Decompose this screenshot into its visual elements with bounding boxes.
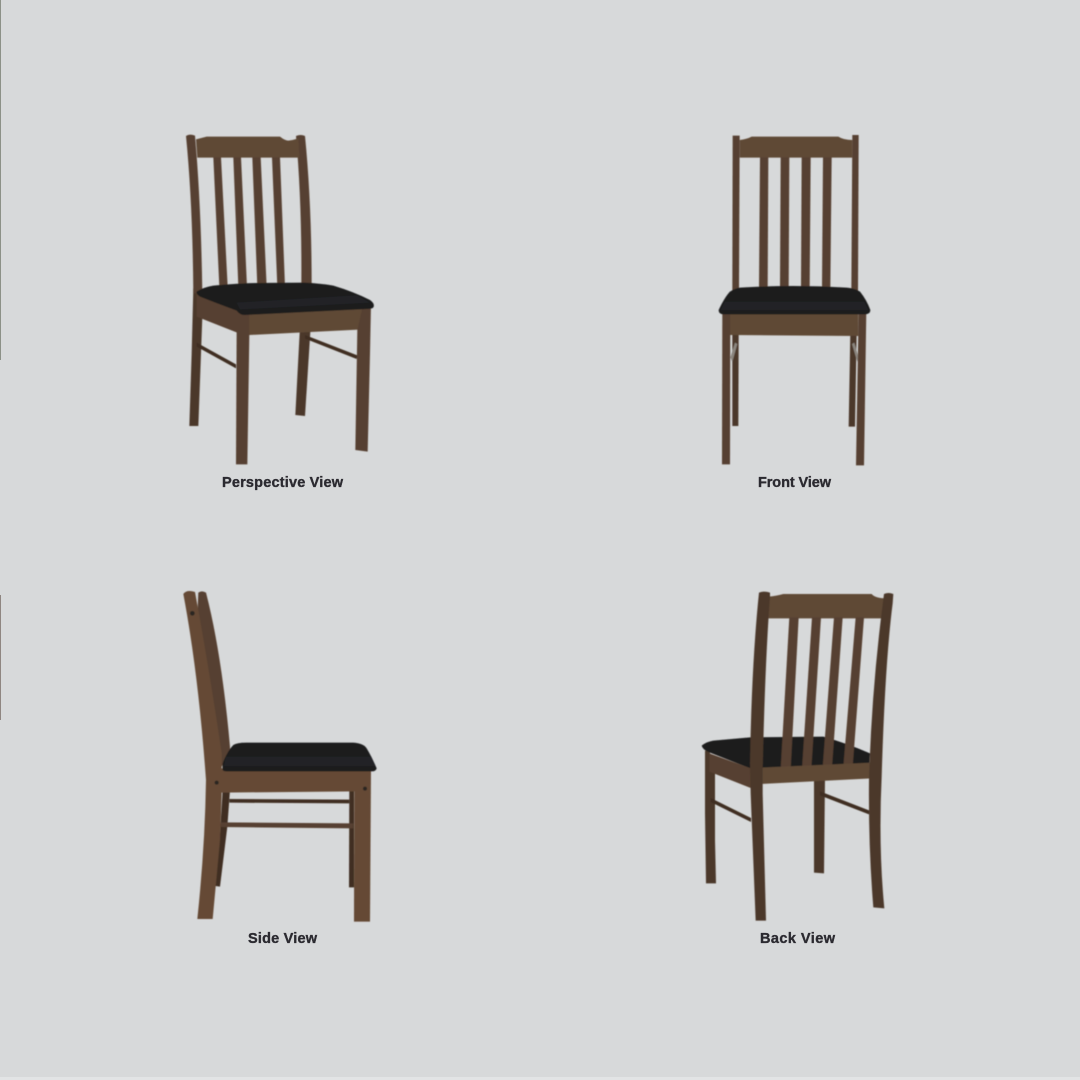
bolts [190,611,367,791]
rear post and leg [183,591,222,919]
far legs and stretchers [705,751,869,883]
left post and leg [750,592,770,921]
seat cushion [197,283,374,315]
side seat rail [220,768,355,793]
seat frame and front legs [197,293,371,464]
seat cushion [222,743,377,771]
panel: side view [183,591,377,947]
chair: perspective view [186,135,374,464]
caption: side view: Side View [248,931,318,947]
chair back [732,135,859,292]
back seat rail [760,763,872,784]
seat cushion [702,737,870,771]
chair back [186,135,312,293]
panel: back view [702,592,893,947]
side seat rail [709,753,752,788]
caption: perspective view: Perspective View [222,475,344,491]
far legs [215,790,354,887]
panel: perspective view [186,135,374,491]
chair back rear piece [197,591,230,767]
seat cushion [719,286,870,314]
right post and leg [869,593,893,908]
chair: side view [183,591,377,922]
caption: back view: Back View [760,931,836,947]
caption: front view: Front View [758,475,832,491]
back legs and braces [730,333,859,427]
front leg [354,768,371,922]
seat frame and front legs [722,310,866,465]
chair: back view [702,592,893,921]
panel: front view [719,135,870,491]
chair back [768,594,887,769]
chair: front view [719,135,870,465]
stretchers [221,799,353,828]
back legs and stretchers [189,288,357,426]
